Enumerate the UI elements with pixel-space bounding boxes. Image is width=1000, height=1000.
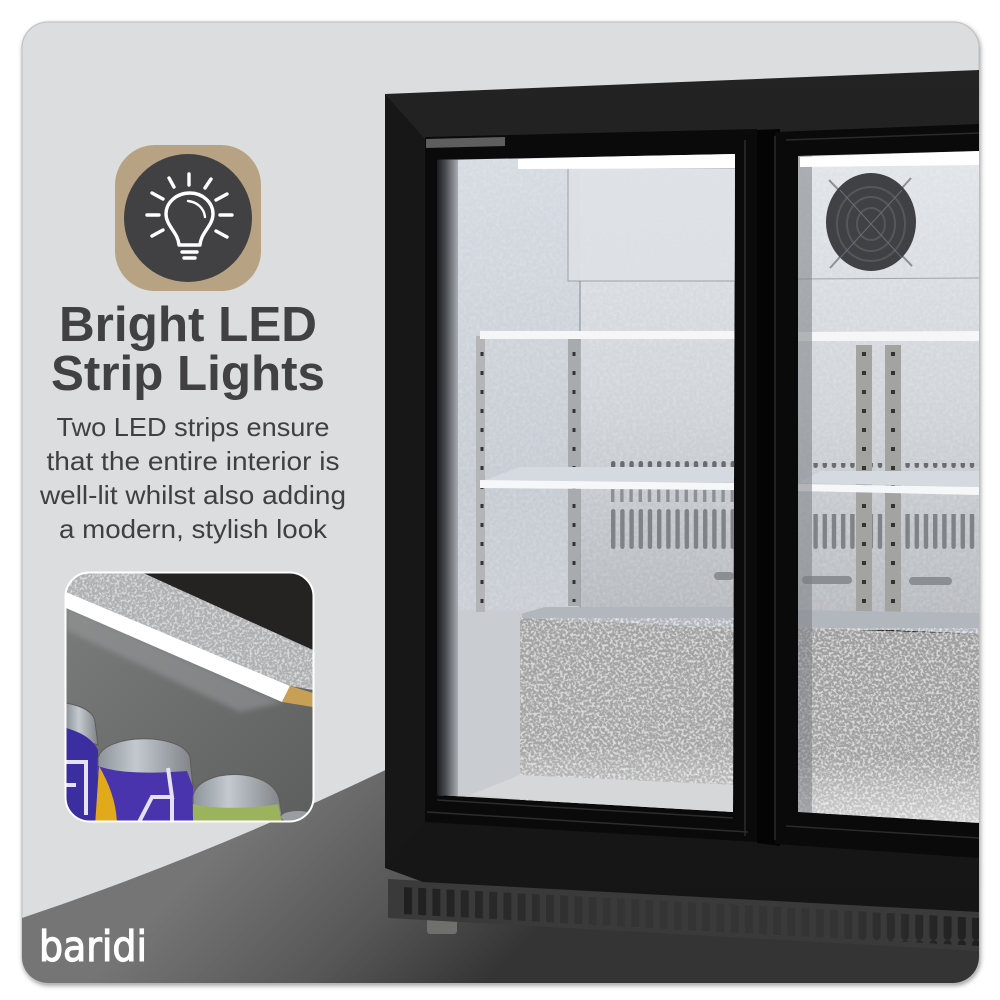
fridge foot: [427, 920, 457, 934]
inset photo: LED strip close-up: [66, 572, 315, 826]
can two: [95, 739, 193, 826]
wall texture: [458, 240, 734, 609]
inset panel texture: [66, 573, 313, 693]
curved dark floor: [22, 763, 990, 990]
base top right: [798, 610, 979, 634]
shelf surface: [480, 467, 735, 482]
rail holes: [864, 352, 893, 608]
right door bevel lines: [775, 133, 979, 840]
shelf surface: [798, 471, 979, 487]
can three neck: [193, 774, 282, 815]
can two lines: [137, 768, 172, 826]
rail back: [476, 336, 485, 618]
mullion: [757, 129, 780, 846]
vent slots: [610, 461, 735, 549]
glass edge right: [798, 150, 812, 830]
can four rim: [281, 811, 308, 820]
base block top: [500, 607, 735, 628]
can one: [66, 703, 98, 826]
fan body: [826, 173, 916, 271]
left glass interior: [437, 150, 740, 820]
inset strip cap: [282, 686, 313, 707]
body text: well-lit whilst also adding: [39, 480, 346, 510]
vent row top: [810, 463, 979, 472]
back rail: [568, 336, 580, 606]
heading: Strip Lights: [51, 347, 325, 401]
left door top reflection: [426, 137, 505, 148]
icon circle: [124, 154, 252, 282]
fridge: [385, 70, 979, 951]
grill plate: [388, 879, 513, 923]
can three: [192, 774, 282, 820]
fan struts: [829, 178, 912, 268]
base block speckle: [520, 618, 735, 803]
grill slot fade: [478, 892, 921, 942]
shelf edge: [798, 484, 979, 495]
body text: that the entire interior is: [46, 446, 340, 476]
panel line: [798, 278, 979, 279]
left upper panel: [568, 168, 736, 281]
vents right: [806, 463, 979, 581]
inset dark frame: [143, 573, 313, 650]
left side wall: [437, 150, 582, 820]
base front right: [798, 628, 979, 825]
icon: light bulb: [147, 174, 232, 258]
floor: [470, 775, 735, 815]
vent long slot: [714, 572, 734, 580]
right glass interior: [798, 150, 979, 830]
rail two: [885, 345, 901, 614]
right back wall: [798, 150, 979, 630]
heading: Bright LED: [59, 298, 317, 352]
LED strip left: [518, 153, 736, 169]
body text: Two LED strips ensure: [56, 412, 330, 442]
can two label yellow: [95, 766, 117, 826]
can two neck: [98, 739, 193, 788]
base block grain: [520, 618, 735, 815]
inset textured panel: [66, 573, 313, 690]
vent row top: [610, 461, 735, 470]
shelf two: [480, 467, 735, 490]
inset LED glow: [66, 606, 283, 712]
ventilation grill: [388, 879, 979, 951]
base block front: [520, 618, 735, 815]
base block side fade: [457, 612, 522, 797]
rail holes: [480, 352, 484, 612]
rail holes: [572, 352, 576, 602]
rail back: [568, 336, 580, 606]
left back wall: [580, 150, 740, 620]
grill slots: [402, 887, 979, 946]
can two body: [98, 766, 193, 826]
rail one: [856, 345, 872, 612]
vent long slots: [806, 580, 948, 581]
shelf two right: [798, 471, 979, 495]
can one lines: [66, 762, 86, 815]
glass edge strip: [437, 150, 458, 820]
logo: baridi: [39, 922, 147, 971]
vent row main: [810, 514, 979, 556]
fan rings: [837, 187, 905, 261]
icon background: tan rounded square: [115, 145, 261, 291]
inset wall: [66, 573, 313, 821]
base speckle right: [798, 628, 979, 823]
left door frame: [425, 129, 757, 842]
panel seam: [579, 281, 581, 610]
right wall texture: [798, 150, 979, 620]
body text: a modern, stylish look: [59, 514, 328, 544]
shelf edge: [480, 480, 735, 490]
icon: LED bulb badge: [115, 145, 261, 291]
right door frame: [775, 124, 979, 858]
rail pair: [856, 345, 901, 614]
can one neck: [66, 703, 98, 745]
fan guard cross: [840, 190, 902, 258]
shelf one right: [798, 331, 979, 341]
left door bevel lines: [427, 140, 748, 836]
vent row middle: [610, 488, 735, 502]
frame mitre left: [385, 94, 425, 308]
LED strip right: [800, 151, 979, 167]
inset LED strip: [66, 592, 290, 702]
can one body: [66, 728, 98, 826]
fridge outer frame: [385, 70, 979, 912]
vent row main: [610, 509, 735, 549]
fan: [826, 173, 916, 271]
can three body: [193, 804, 282, 820]
inset border: [66, 572, 314, 822]
left rail: [476, 336, 485, 618]
shelf one: [480, 331, 735, 339]
